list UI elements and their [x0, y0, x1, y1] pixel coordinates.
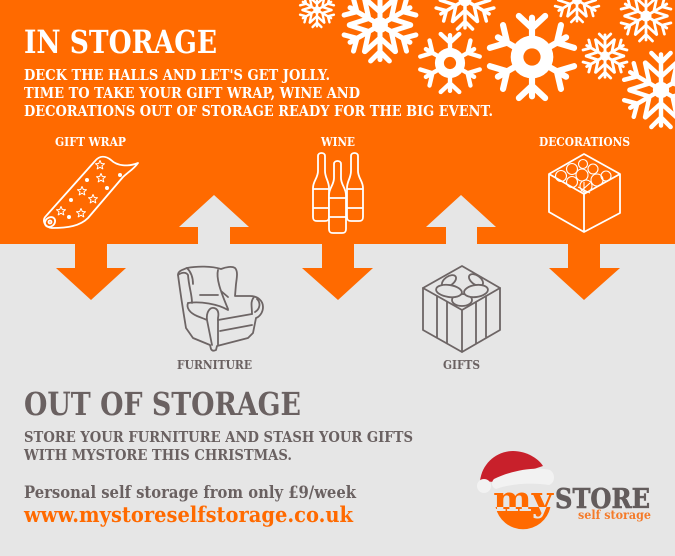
- arrow: up grey left: [179, 195, 249, 244]
- icon: box of decorations: [549, 154, 620, 232]
- panel: in storage orange background: [0, 0, 675, 244]
- arrow: down orange centre: [302, 244, 373, 300]
- icon: snowflake small top: [299, 0, 335, 27]
- title: in storage: IN STORAGE: [24, 23, 217, 61]
- text block: in storage intro: [24, 67, 493, 120]
- icon: gift box: [423, 266, 500, 352]
- santa hat: [477, 451, 554, 493]
- icon: armchair: [178, 267, 263, 351]
- text: pricing: Personal self storage from only £9/week: [24, 483, 357, 503]
- left bottle: [313, 153, 329, 221]
- logo: mystore with santa hat: [477, 451, 651, 529]
- bottle label lines: [313, 189, 363, 208]
- text block: in storage intro: DECK THE HALLS AND LET'S GET JOLLY.: [24, 67, 330, 84]
- logo circle: [496, 507, 550, 529]
- icon: snowflake small right: [581, 34, 629, 78]
- text block: in storage intro: DECORATIONS OUT OF STORAGE READY FOR THE BIG EVENT.: [24, 103, 493, 120]
- icon: snowflake large top: [341, 0, 419, 61]
- label: wine: WINE: [320, 135, 355, 149]
- text block: out of storage intro: WITH MYSTORE THIS CHRISTMAS.: [23, 447, 292, 464]
- icon: gift wrap roll: [43, 157, 138, 229]
- text block: in storage intro: TIME TO TAKE YOUR GIFT WRAP, WINE AND: [24, 85, 360, 102]
- logo wordmark: my: my: [493, 479, 555, 520]
- right bottle: [347, 153, 363, 221]
- arrow: down orange right: [549, 244, 620, 300]
- arrow: up grey right: [426, 195, 496, 244]
- snowflakes: [299, 0, 675, 127]
- label: furniture: FURNITURE: [177, 358, 252, 372]
- icon: snowflake corner: [619, 0, 673, 41]
- icon: snowflake top right: [553, 0, 601, 22]
- text block: out of storage intro: STORE YOUR FURNITURE AND STASH YOUR GIFTS: [24, 429, 413, 446]
- logo wordmark: my: [494, 492, 554, 518]
- icon: snowflake ring medium: [420, 34, 480, 92]
- arrow: down orange left: [56, 244, 126, 300]
- label: decorations: DECORATIONS: [539, 135, 630, 149]
- text: website url: www.mystoreselfstorage.co.uk: [23, 502, 353, 527]
- panel: out of storage grey background: [0, 244, 675, 556]
- label: gifts: GIFTS: [443, 358, 480, 372]
- title: out of storage: OUT OF STORAGE: [24, 385, 301, 423]
- logo wordmark: store: STORE: [555, 484, 650, 515]
- icon: snowflake large right: [621, 53, 675, 127]
- icon: snowflake ring large: [490, 16, 574, 98]
- icon: snowflake top centre: [434, 0, 496, 29]
- icon: wine bottles: [313, 153, 363, 233]
- logo tagline: self storage: [578, 508, 651, 522]
- logo wordmark: my: my: [493, 479, 555, 520]
- text block: out of storage intro: [23, 429, 413, 464]
- label: gift wrap: GIFT WRAP: [55, 135, 126, 149]
- middle bottle: [329, 161, 346, 233]
